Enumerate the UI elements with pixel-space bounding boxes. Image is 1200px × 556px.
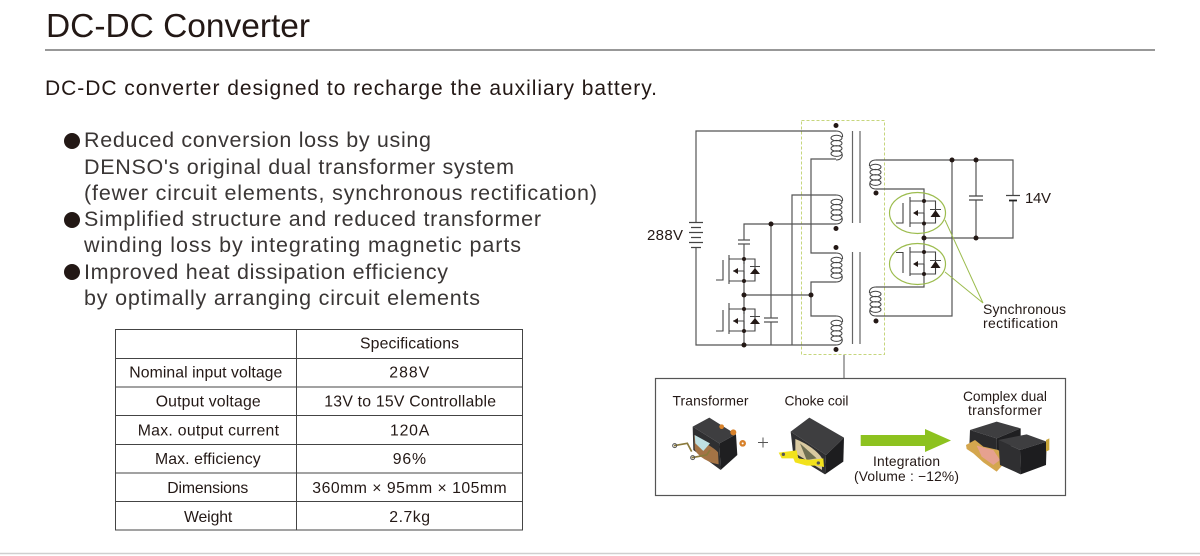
battery: 288V: [647, 222, 703, 248]
label: transformer: Transformer: [672, 394, 749, 408]
transformer cores: [852, 131, 860, 344]
bullet: winding loss: winding loss by integrating magnetic parts: [83, 233, 521, 257]
title: DC-DC Converter: [46, 8, 310, 45]
bullet: heat dissipation: Improved heat dissipation efficiency: [84, 260, 448, 284]
specifications table: 360mm × 95mm × 105mm: [312, 480, 507, 497]
synchronous rectification callout: [890, 192, 1066, 331]
specifications table: 120A: [390, 422, 430, 440]
specifications table: Nominal input voltage: [129, 364, 283, 382]
primary coils: [831, 131, 881, 345]
integration label: [854, 454, 959, 484]
label: complex dual transformer: Complex dual: [963, 389, 1047, 404]
bullet: conversion loss: [64, 128, 597, 205]
icon: choke coil: [779, 418, 844, 474]
specifications table: Output voltage: [156, 394, 261, 410]
bullet: winding loss: Simplified structure and reduced transformer: [84, 207, 541, 231]
synchronous rectification callout: rectification: [983, 315, 1058, 331]
specifications table: 2.7kg: [389, 509, 430, 526]
connector stem: [843, 355, 845, 378]
dashed transformer boundary: [802, 120, 884, 354]
secondary wiring: [876, 160, 1013, 316]
specifications table: Specifications: [360, 336, 459, 352]
integration label: Integration: [873, 454, 940, 469]
primary capacitors: [738, 240, 778, 322]
specifications table: Max. output current: [138, 422, 280, 440]
bullet: heat dissipation: by optimally arranging circuit elements: [84, 286, 480, 310]
primary wiring: [696, 131, 836, 345]
primary MOSFETs: [716, 255, 760, 334]
connection dots: [742, 123, 978, 352]
bullet: conversion loss: DENSO's original dual transformer system: [84, 155, 514, 179]
circuit diagram: [647, 120, 1066, 354]
synchronous rectification callout: Synchronous: [983, 301, 1066, 317]
subtitle: DC-DC converter designed to recharge the auxiliary battery.: [45, 77, 657, 100]
label: complex dual transformer: transformer: [968, 403, 1042, 418]
specifications table: Weight: [184, 509, 233, 526]
capacitor and battery: 14V: 14V: [1025, 190, 1051, 207]
specifications table: 13V to 15V Controllable: [324, 394, 496, 410]
battery: 288V: 288V: [647, 227, 683, 244]
label: complex dual transformer: [963, 389, 1047, 418]
label: choke coil: Choke coil: [784, 394, 848, 408]
specifications table: Dimensions: [167, 480, 248, 497]
bullet: winding loss: [64, 207, 541, 257]
arrow: integration: [861, 429, 951, 452]
integration panel: [656, 378, 1066, 496]
secondary MOSFETs: [896, 197, 941, 276]
specifications table: Max. efficiency: [155, 451, 261, 468]
icon: complex dual transformer: [966, 422, 1049, 474]
bullet: conversion loss: Reduced conversion loss by using: [84, 128, 431, 152]
capacitor and battery: 14V: [969, 190, 1051, 207]
specifications table: [116, 330, 522, 530]
bullet: heat dissipation: [64, 260, 480, 310]
icon: transformer: [673, 418, 746, 470]
specifications table: 96%: [393, 451, 426, 468]
integration label: (Volume : −12%): [854, 469, 959, 484]
plus sign: [758, 438, 768, 448]
specifications table: 288V: [389, 364, 430, 382]
bullet: conversion loss: (fewer circuit elements, synchronous rectification): [84, 181, 597, 205]
feature bullet list: [64, 128, 597, 310]
